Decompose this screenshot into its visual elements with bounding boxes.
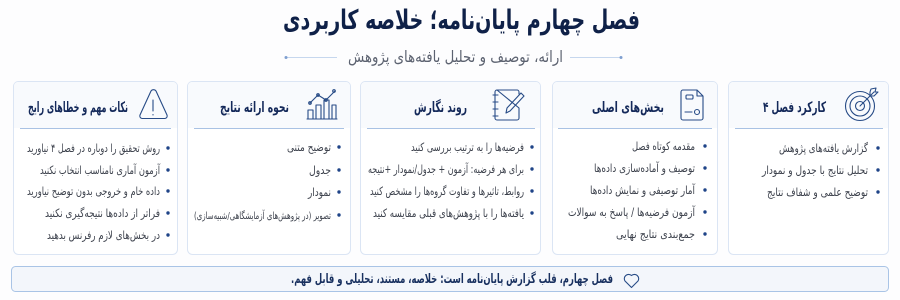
list: مقدمه کوتاه فصل	[632, 139, 695, 154]
icon: heart	[624, 274, 639, 288]
panel: بخش‌های اصلی	[552, 82, 718, 254]
list: در بخش‌های لازم رفرنس بدهید	[47, 228, 160, 243]
heading: بخش‌های اصلی	[592, 100, 664, 116]
list: آمار توصیفی و نمایش داده‌ها	[590, 183, 696, 198]
list: جمع‌بندی نتایج نهایی	[616, 227, 695, 241]
list: توضیح متنی	[287, 140, 331, 155]
list: نمودار	[307, 185, 331, 200]
list: برای هر فرضیه: آزمون + جدول/نمودار +نتیجه	[368, 162, 524, 177]
list: آزمون آماری نامناسب انتخاب نکنید	[40, 163, 161, 178]
icon: bar chart	[307, 90, 337, 119]
list: توضیح علمی و شفاف نتایج	[767, 185, 868, 200]
list: یافته‌ها را با پژوهش‌های قبلی مقایسه کنید	[373, 206, 524, 221]
title: فصل چهارم پایان‌نامه؛ خلاصه کاربردی	[283, 5, 640, 36]
list: توصیف و آماده‌سازی داده‌ها	[594, 161, 695, 176]
list	[194, 140, 341, 222]
panel: نحوه ارائه نتایج	[188, 82, 350, 254]
list	[368, 140, 534, 221]
list: داده خام و خروجی بدون توضیح نیاورید	[27, 184, 160, 199]
heading: نکات مهم و خطاهای رایج	[28, 100, 128, 116]
list: روابط، تاثیرها و تفاوت گروه‌ها را مشخص کنید	[370, 184, 524, 199]
list: تحلیل نتایج با جدول و نمودار	[761, 163, 868, 178]
icon: target	[846, 88, 878, 120]
panel: نکات مهم و خطاهای رایج	[14, 82, 178, 254]
list: آزمون فرضیه‌ها / پاسخ به سوالات	[568, 205, 696, 220]
banner text: فصل چهارم، قلب گزارش پایان‌نامه است: خلاصه، مستند، تحلیلی و قابل فهم.	[291, 271, 613, 287]
list: روش تحقیق را دوباره در فصل ۴ نیاورید	[27, 141, 160, 156]
callout: bottom banner	[12, 266, 888, 292]
list	[27, 141, 170, 243]
panel: روند نگارش	[360, 82, 540, 254]
list: تصویر (در پژوهش‌های آزمایشگاهی/شبیه‌سازی)	[194, 209, 331, 222]
list: گزارش یافته‌های پژوهش	[779, 141, 868, 156]
list: فراتر از داده‌ها نتیجه‌گیری نکنید	[45, 206, 160, 221]
list: جدول	[309, 163, 331, 178]
heading: نحوه ارائه نتایج	[220, 100, 289, 116]
icon: notebook and pen	[493, 90, 524, 120]
list: فرضیه‌ها را به ترتیب بررسی کنید	[411, 140, 524, 155]
list	[568, 139, 707, 241]
icon: warning	[140, 90, 167, 118]
panel: کارکرد فصل ۴	[728, 82, 888, 254]
icon: document	[681, 90, 703, 120]
subtitle: ارائه، توصیف و تحلیل یافته‌های پژوهش	[348, 48, 563, 67]
heading: کارکرد فصل ۴	[763, 100, 826, 116]
heading: روند نگارش	[414, 98, 467, 116]
list	[761, 141, 880, 200]
